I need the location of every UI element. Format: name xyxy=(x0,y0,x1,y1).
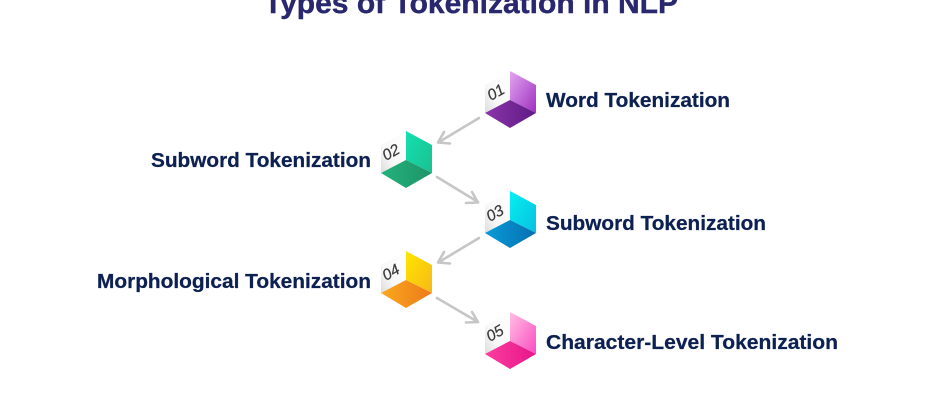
step 03: cube: 03 xyxy=(484,202,507,225)
step 05: label: Character-Level Tokenization xyxy=(546,331,838,354)
step 02: label: Subword Tokenization xyxy=(151,149,371,172)
step 02: cube xyxy=(380,131,432,188)
step 05: cube: 05 xyxy=(484,322,507,345)
step 03: label: Subword Tokenization xyxy=(546,212,766,235)
step 04: cube xyxy=(380,251,432,308)
step 01: cube: 01 xyxy=(484,81,508,104)
arrow: 04 to 05 xyxy=(437,298,478,322)
step 02: cube: 02 xyxy=(380,141,403,164)
arrow: 02 to 03 xyxy=(437,177,478,203)
step 03: cube xyxy=(484,191,536,248)
step 01: label: Word Tokenization xyxy=(546,89,730,112)
step 04: label: Morphological Tokenization xyxy=(97,270,371,293)
step 04: cube: 04 xyxy=(380,261,403,284)
step 01: cube xyxy=(484,71,536,128)
arrow: 03 to 04 xyxy=(438,238,479,264)
arrow: 01 to 02 xyxy=(438,118,479,144)
step 05: cube xyxy=(484,312,536,369)
